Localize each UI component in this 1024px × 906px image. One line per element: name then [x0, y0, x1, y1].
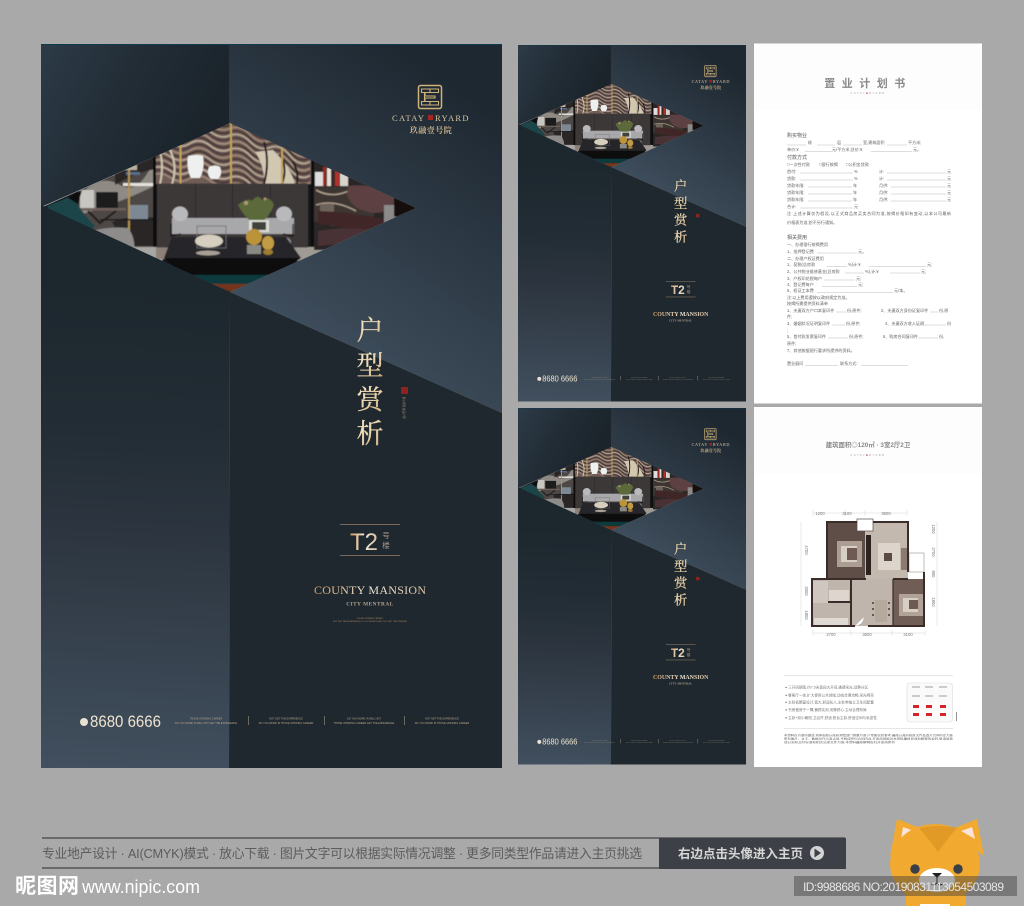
plan header tint [754, 408, 982, 474]
panel: small poster bottom: RYARD [713, 442, 730, 447]
panel: small poster bottom: T2 [671, 646, 685, 660]
section: payment method: 元 [947, 169, 951, 174]
form header tint [754, 44, 982, 110]
section: payment method: 贷款年限: [787, 182, 805, 188]
dimensions: 4700 [804, 545, 809, 555]
panel: small poster top: CATAY [692, 79, 708, 84]
dimensions: 3100 [842, 511, 852, 516]
section: payment method: 月供: [879, 182, 888, 188]
red seal [401, 387, 408, 394]
panel: small poster bottom: THOSE UPSWING CAREER [592, 741, 608, 742]
poster artwork with interior photo [40, 44, 502, 768]
building location key [907, 683, 952, 722]
section: related fees: 元; [927, 262, 932, 267]
logo: red square [428, 115, 433, 120]
disclaimer: 本资料仅为要约邀请,具体面积以政府测绘部门测量为准,户型图仅供参考,最终以政府批准文件及双方合同约定为准 [784, 733, 954, 737]
dimensions: 1200 [931, 524, 936, 534]
panel: small poster top: 户 [674, 179, 687, 194]
panel: small poster top: NOT GET THE EXPERIENCE [631, 378, 647, 379]
panel: small poster top: 楼 [687, 289, 691, 294]
section: payment method: 注:上述计算仅为假设,以正式商品房买卖合同为准,按揭价格如有变动,以本公司最新 [787, 210, 951, 216]
panel: small poster bottom: 号 [687, 647, 691, 652]
watermark id strip: ID:9988686 NO:20190831113054503089 [803, 880, 1004, 894]
panel: small poster top: 玖融壹号院 [700, 85, 721, 90]
section: purchase property: 元/平方米;总价:¥ [832, 146, 863, 152]
disclaimer: 所有图片、文字、数据仅作示意之用,不构成任何合同内容,开发商保留对本资料最终修改和解释的权利,敬请留意 [784, 736, 954, 740]
panel: small poster top: DO YOU WORK IN THOSE UPSWING CAREER [626, 378, 653, 381]
section: related fees: 原件; [787, 340, 796, 346]
site logo: 昵图网 [15, 875, 80, 898]
tiny tagline: NOT GET THE EXPERIENCE DO YOU WORK IN WILL NOT GET THE UPSWING [333, 621, 407, 623]
section: payment method: 元 [947, 197, 951, 202]
section: related fees: 5、权证工本费 [787, 287, 814, 293]
section: payment method: 元 [947, 183, 951, 188]
panel: small poster top: DO YOU WORK IN WILL NOT [669, 378, 686, 379]
section: related fees: 1、契税(总房款 [787, 261, 815, 267]
building tag T2: 楼 [382, 540, 390, 550]
section: related fees: 二、办理产权证费用 [787, 255, 824, 261]
logo: wordmark end: RYARD [435, 113, 470, 123]
section: payment method: 月供: [879, 196, 888, 202]
section: related fees: 元; [856, 276, 861, 281]
section: related fees: %)计:¥ [848, 261, 861, 267]
section: purchase property: 室,建筑面积 [863, 139, 885, 145]
section: payment method: 价格表为准,恕不另行通知。 [787, 219, 837, 225]
panel: small poster top: 号 [687, 284, 691, 289]
form underlines [787, 145, 946, 366]
panel: small poster bottom: DO YOU WORK IN THOSE UPSWING CAREER [703, 741, 730, 744]
section: related fees: 4、登记费每户 [787, 281, 814, 287]
project name: COUNTY MANSION [314, 583, 426, 597]
section: related fees: 元; [858, 282, 863, 287]
panel: floor plan sheet [754, 407, 982, 767]
section: related fees: 份 [947, 320, 951, 326]
panel: small poster top: THOSE UPSWING CAREER GET THE EXPERIENCE [663, 378, 693, 381]
dimensions: 3600 [862, 632, 872, 637]
panel: small poster top: DO YOU WORK IN WILL NOT GET THE EXPERIENCE [584, 379, 615, 381]
promo text: 专业地产设计 · AI(CMYK)模式 · 放心下载 · 图片文字可以根据实际情况调整 · 更多同类型作品请进入主页挑选 [42, 846, 642, 861]
panel: small poster bottom: 赏 [674, 575, 688, 591]
panel: small poster bottom: 析 [674, 591, 687, 607]
section: related fees: 份,原件; [847, 307, 862, 313]
dimensions: 1800 [804, 610, 809, 620]
dimensions: 3100 [903, 632, 913, 637]
section: purchase property: 元。 [913, 147, 921, 152]
site logo: www.nipic.com [81, 876, 200, 897]
section: payment method: 贷款年限: [787, 196, 805, 202]
project subtitle: CITY MENTRAL [346, 602, 394, 608]
section: related fees: ; [787, 328, 788, 333]
footer columns: DO YOU WORK IN THOSE UPSWING CAREER [259, 722, 313, 725]
room notes: ● 主卧低飘窗设计,宽大,舒适私人,主卧带独立卫生间配置 [785, 700, 874, 704]
form title: 置业计划书 [824, 76, 912, 90]
section: related fees: 按揭所需提供资料清单 [787, 300, 828, 306]
dimensions: 1200 [815, 511, 825, 516]
panel: small poster top: RYARD [713, 79, 730, 84]
building tag T2: 号 [382, 531, 390, 540]
section: payment method: □一次性付款 [787, 161, 810, 167]
section: payment method: 月供: [879, 189, 888, 195]
room notes [784, 675, 953, 728]
section: related fees: 份, [939, 333, 944, 339]
panel: small poster bottom: DO YOU WORK IN THOSE UPSWING CAREER [626, 741, 653, 744]
section: payment method [787, 154, 951, 225]
section: related fees: 份,原件; [846, 320, 861, 326]
panel: small poster bottom: THOSE UPSWING CAREER GET THE EXPERIENCE [663, 741, 693, 744]
section: payment method: 计: [879, 168, 884, 174]
section: payment method: 元 [947, 190, 951, 195]
section: related fees: 件; [787, 313, 792, 319]
section: related fees: 相关费用 [787, 234, 807, 241]
panel: small poster bottom [518, 408, 746, 764]
footer columns: THOSE UPSWING CAREER GET THE EXPERIENCE [334, 722, 395, 725]
section: related fees: %),计:¥ [865, 268, 879, 274]
section: payment method: 首付: [787, 168, 796, 174]
footer columns [175, 716, 469, 725]
compass [955, 712, 958, 721]
section: payment method: □银行按揭 [819, 161, 838, 167]
panel: small poster top: 8680 6666 [542, 373, 578, 383]
panel: small poster top: T2 [671, 283, 685, 297]
section: payment method: % [854, 176, 858, 181]
plan brand line: CATAY■RYARD [850, 453, 886, 457]
section: purchase property: 栋 [808, 139, 812, 145]
room notes: ● 书房做房于一隅,兼顾实用,安静舒心,主动合理布局 [785, 707, 867, 712]
tiny tagline: THOSE UPSWING CAREER [357, 618, 383, 620]
room notes: ● 主卧+双小朝阳,卫浴齐,舒适,阳台主卧,舒适空间与私密性 [785, 715, 877, 720]
panel: small poster bottom: 型 [674, 558, 687, 574]
panel: small poster bottom: CATAY [692, 442, 708, 447]
section: purchase property: 购买物业 [787, 132, 807, 139]
section: payment method: 付款方式 [787, 154, 807, 161]
panel: small poster top: DO YOU WORK IN THOSE UPSWING CAREER [703, 378, 730, 381]
footer columns: NOT GET THE EXPERIENCE [425, 718, 459, 720]
panel: small poster top: THOSE UPSWING CAREER [592, 378, 608, 379]
section: purchase property: 平方米; [908, 139, 921, 145]
section: related fees: 4、夫妻双方收入证明 [885, 320, 924, 326]
title: vertical heading: 户 [356, 316, 384, 346]
panel: small poster bottom: COUNTY MANSION [653, 675, 709, 681]
panel: small poster bottom: 户 [674, 542, 687, 557]
section: related fees: 5、首付款发票复印件 [787, 333, 826, 339]
building tag T2 [340, 524, 400, 556]
section: payment method: 计: [879, 175, 884, 181]
site logo [15, 875, 200, 898]
panel: small poster bottom: DO YOU WORK IN WILL NOT GET THE EXPERIENCE [584, 742, 615, 744]
section: related fees: 一、办理银行按揭费用 [787, 241, 828, 247]
button label: 右边点击头像进入主页 [678, 846, 803, 861]
footer columns: NOT GET THE EXPERIENCE [269, 718, 303, 720]
section: related fees: 份,原 [939, 307, 948, 313]
disclaimer [784, 733, 954, 744]
section: related fees: 3、婚姻状况证明复印件 [787, 320, 830, 326]
form brand line: CATAY■RYARD [850, 91, 886, 95]
section: related fees: 1、抵押登记费 [787, 248, 814, 254]
panel: small poster top: COUNTY MANSION [653, 312, 709, 318]
dimensions: 800 [931, 570, 936, 578]
dimensions: 2700 [826, 632, 836, 637]
dimensions: 2700 [931, 547, 936, 557]
icon: cat mascot [890, 819, 984, 906]
panel: small poster top: CITY MENTRAL [669, 319, 692, 322]
floor plan drawing [812, 519, 925, 626]
footer columns: THOSE UPSWING CAREER [190, 718, 222, 720]
section: related fees: 元; [921, 269, 926, 274]
panel: small poster top: 型 [674, 195, 687, 211]
section: related fees: 7、其他按据银行要求所提供的资料。 [787, 347, 855, 353]
section: payment method: 年 [853, 182, 857, 188]
section: related fees: 元/本。 [894, 287, 907, 293]
section: related fees: 置业顾问 [787, 360, 803, 366]
section: related fees: 元。 [858, 249, 866, 254]
plan title: 建筑面积◎120㎡ · 3室2厅2卫 [826, 440, 911, 449]
dimensions: 3500 [881, 511, 891, 516]
panel: small poster bottom: NOT GET THE EXPERIENCE [631, 741, 647, 742]
section: related fees: 1、夫妻双方户口本复印件 [787, 307, 834, 313]
title: vertical heading [356, 316, 384, 449]
panel: small poster top: 析 [674, 228, 687, 244]
phone number: 8680 6666 [90, 712, 161, 731]
section: payment method: 年 [853, 189, 857, 195]
section: related fees [787, 234, 951, 366]
section: related fees: 联系方式: [840, 360, 858, 366]
logo: wordmark: CATAY [392, 113, 425, 123]
dimensions [801, 510, 937, 637]
section: payment method: 贷款年限: [787, 189, 805, 195]
section: payment method: 元 [854, 204, 858, 209]
panel: small poster bottom: NOT GET THE EXPERIENCE [708, 741, 725, 742]
banner: promo strip [42, 837, 846, 869]
section: related fees: 6、购房合同复印件 [883, 333, 918, 339]
section: payment method: 年 [853, 196, 857, 202]
section: payment method: 元 [947, 176, 951, 181]
button arrow icon [810, 846, 824, 860]
panel: small poster bottom: DO YOU WORK IN WILL NOT [669, 741, 686, 742]
panel: small poster top [518, 45, 746, 401]
room notes: ● 餐客厅一体,扩大使用公共领域,动线合理流畅,采光明亮 [785, 692, 874, 698]
building tag T2: T2 [350, 529, 378, 556]
panel: purchase plan form [754, 44, 982, 404]
section: payment method: 贷款: [787, 175, 796, 181]
logo: chinese name: 玖融壹号院 [410, 125, 452, 135]
section: related fees: 2、夫妻双方身份证复印件 [881, 307, 928, 313]
panel: large poster cover [40, 44, 502, 768]
footer columns: DO YOU WORK IN WILL NOT [347, 718, 381, 720]
section: related fees: 3、产权印花税每户 [787, 275, 822, 281]
room notes: ● 三开间朝南,约7.5米宽阔大开间,通透采光,动静分区 [785, 684, 868, 690]
section: payment method: 合计: [787, 203, 796, 209]
plan sheet [754, 407, 982, 767]
panel: small poster top: 赏 [674, 212, 688, 228]
section: payment method: % [854, 169, 858, 174]
section: purchase property: 单价:¥ [787, 146, 799, 152]
footer columns: DO YOU WORK IN THOSE UPSWING CAREER [415, 722, 469, 725]
form sheet [754, 44, 982, 404]
disclaimer: 请以实际交付标准和相关法律文件为准,本资料最终解释权归开发商所有 [784, 740, 896, 744]
panel: small poster bottom: 楼 [687, 652, 691, 657]
section: purchase property: 层 [837, 139, 841, 145]
dimensions: 1800 [931, 597, 936, 607]
section: payment method: □公积金贷款 [846, 161, 869, 167]
section: related fees: 注:以上费用遵按以政府规定为准。 [787, 294, 850, 300]
section: related fees: 份,原件; [849, 333, 864, 339]
footer columns: DO YOU WORK IN WILL NOT GET THE EXPERIENCE [175, 722, 237, 725]
panel: small poster bottom: 8680 6666 [542, 736, 578, 746]
title: vertical heading: 型 [356, 351, 384, 381]
title: vertical heading: 析 [356, 419, 384, 449]
section: purchase property [787, 132, 921, 152]
seal caption: 匠心筑造 臻品户型 [402, 397, 406, 419]
promo button [659, 838, 846, 869]
title: vertical heading: 赏 [356, 385, 384, 415]
dimensions: 2000 [804, 586, 809, 596]
phone icon [80, 718, 88, 726]
watermark id strip [794, 876, 1017, 896]
section: related fees: 2、公共物业维修基金(总房款 [787, 268, 840, 274]
panel: small poster bottom: 玖融壹号院 [700, 448, 721, 453]
panel: small poster bottom: CITY MENTRAL [669, 682, 692, 685]
panel: small poster top: NOT GET THE EXPERIENCE [708, 378, 725, 379]
logo: key motif [418, 86, 442, 108]
